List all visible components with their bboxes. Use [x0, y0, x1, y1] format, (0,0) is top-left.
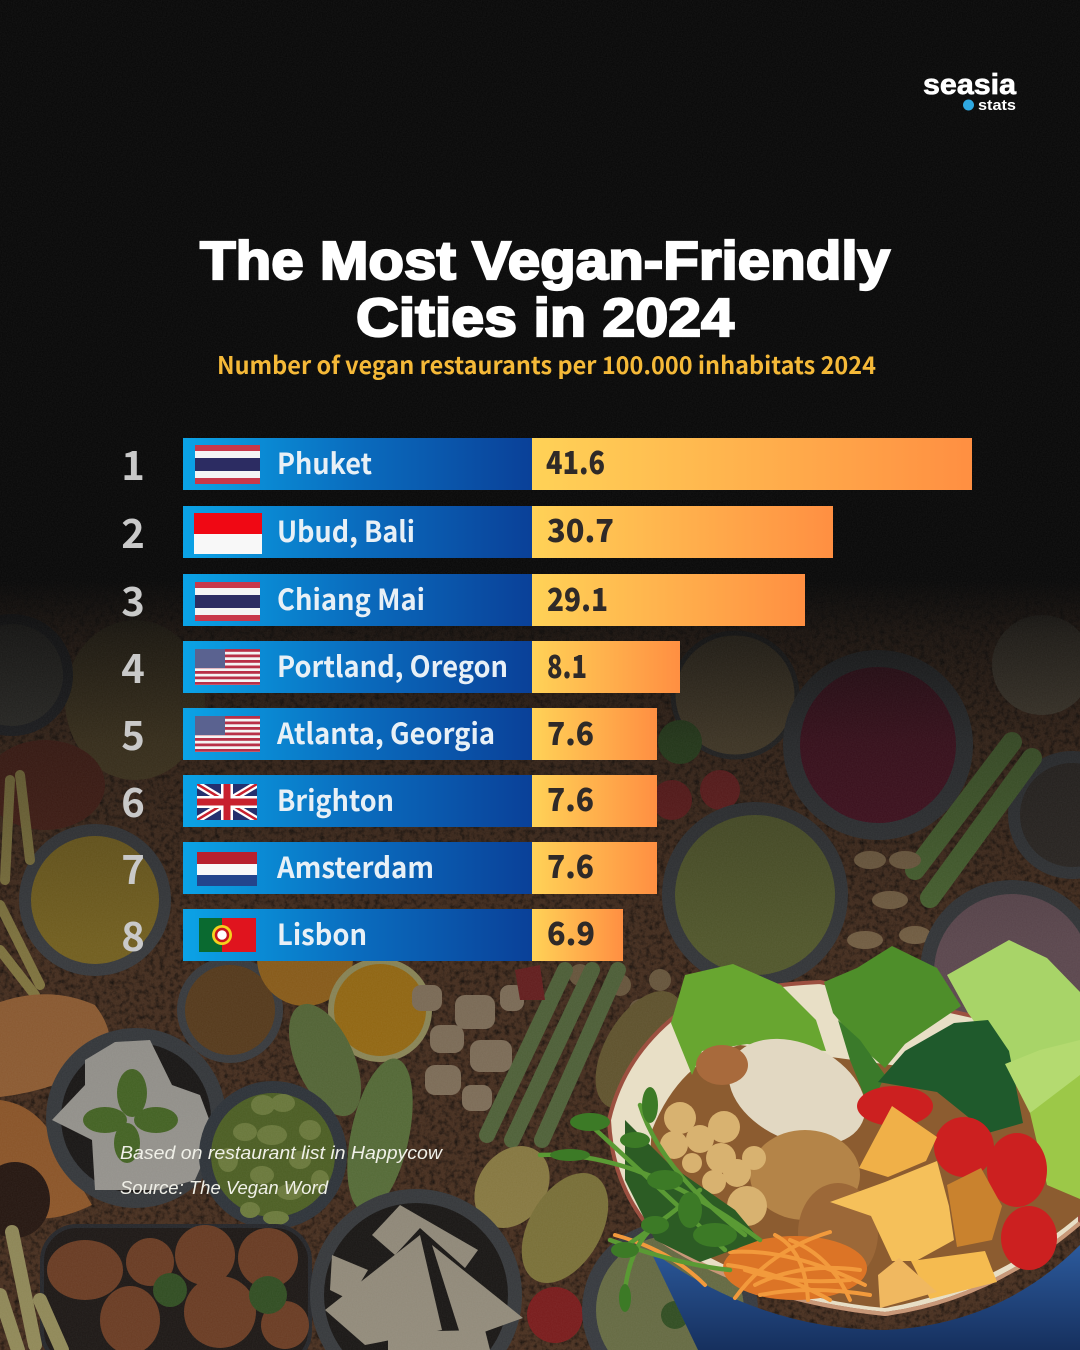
row: Amsterdam: 7: [121, 838, 145, 896]
row: Ubud, Bali: 30.7: [547, 506, 614, 552]
row: Phuket: 1: [121, 434, 145, 492]
row: Atlanta, Georgia: [121, 704, 657, 762]
row: Phuket: [121, 434, 972, 492]
row: Portland, Oregon: [121, 637, 680, 695]
row: Lisbon: 6.9: [547, 909, 595, 955]
row: Portland, Oregon: Portland, Oregon: [277, 644, 508, 686]
bowl exterior: [650, 1245, 1080, 1350]
row: Lisbon: [123, 909, 623, 961]
row: Atlanta, Georgia: 7.6: [547, 709, 594, 755]
row: Chiang Mai: [121, 570, 805, 628]
row: Amsterdam: [121, 838, 657, 896]
rice and nuts: [696, 1018, 883, 1283]
row: Lisbon: Lisbon: [277, 912, 367, 954]
row: Ubud, Bali: 2: [121, 502, 145, 560]
row: Brighton: Brighton: [277, 778, 394, 820]
food photo background: [0, 560, 1080, 1350]
title: [200, 231, 890, 348]
source note: Based on restaurant list in Happycow: [120, 1143, 443, 1163]
row: Phuket: Phuket: [277, 441, 372, 483]
source note: [120, 1143, 443, 1198]
row: Chiang Mai: 3: [121, 570, 145, 628]
lettuce: [671, 940, 1080, 1199]
row: Phuket: 41.6: [546, 438, 605, 484]
logo: stats: [978, 97, 1016, 114]
tomatoes: [857, 1086, 1057, 1270]
logo: [923, 69, 1017, 114]
row: Brighton: [123, 775, 657, 827]
chickpeas: [660, 1102, 767, 1226]
food base: [650, 1045, 1080, 1308]
row: Amsterdam: 7.6: [547, 842, 594, 888]
herb sprouts: [540, 1087, 760, 1312]
subtitle: Number of vegan restaurants per 100.000 inhabitats 2024: [217, 346, 876, 381]
title: The Most Vegan-Friendly: [200, 231, 890, 291]
row: Ubud, Bali: [121, 502, 833, 560]
row: Portland, Oregon: 8.1: [547, 642, 587, 688]
source note: Source: The Vegan Word: [120, 1178, 329, 1198]
row: Chiang Mai: 29.1: [547, 575, 608, 621]
row: Brighton: 6: [121, 771, 145, 829]
row: Ubud, Bali: Ubud, Bali: [277, 509, 415, 551]
bar chart: [121, 434, 972, 963]
row: Atlanta, Georgia: Atlanta, Georgia: [276, 711, 495, 753]
row: Portland, Oregon: 4: [121, 637, 145, 695]
bowl interior: [609, 982, 1080, 1314]
row: Atlanta, Georgia: 5: [121, 704, 145, 762]
row: Brighton: 7.6: [547, 775, 594, 821]
title: Cities in 2024: [356, 288, 734, 348]
row: Chiang Mai: Chiang Mai: [277, 577, 425, 619]
row: Lisbon: 8: [121, 905, 145, 963]
carrot shreds: [615, 1232, 870, 1300]
row: Amsterdam: Amsterdam: [276, 845, 434, 887]
logo: seasia: [923, 69, 1017, 101]
illustration: salad bowl: [540, 940, 1080, 1350]
mango cubes: [830, 1106, 1002, 1308]
